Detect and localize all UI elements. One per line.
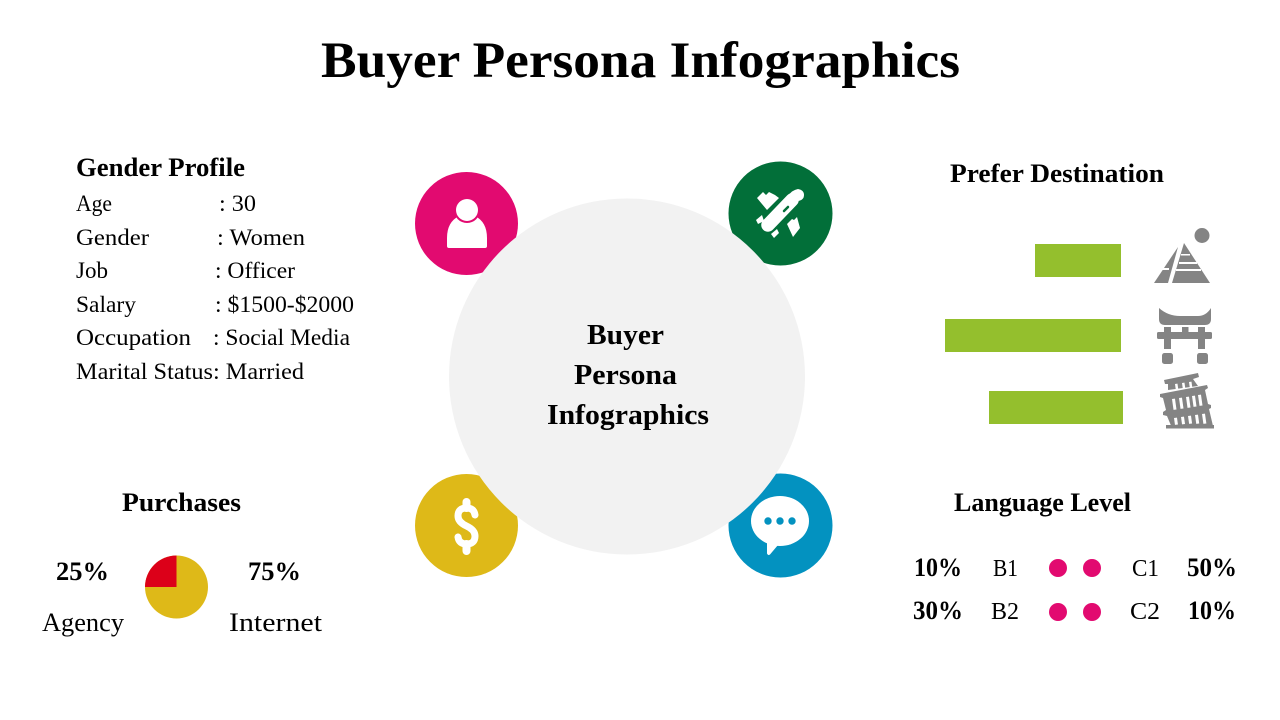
row: B2 and C2 <box>913 596 1236 625</box>
icon: torii gate <box>1157 308 1212 364</box>
profile row: job <box>76 258 295 283</box>
row: B1 and C1: 10% <box>914 553 962 582</box>
profile row: occupation: Occupation <box>76 325 192 350</box>
title: Buyer Persona Infographics <box>321 33 960 89</box>
stat: internet 75% <box>229 557 323 637</box>
central label: Persona <box>574 360 677 391</box>
stat: internet 75%: Internet <box>229 608 323 637</box>
profile row: gender <box>76 225 306 250</box>
icon: dollar badge <box>415 474 518 577</box>
heading: prefer destination: Prefer Destination <box>950 159 1165 188</box>
profile row: job: Job <box>76 258 108 283</box>
panel: prefer destination <box>945 159 1214 428</box>
profile row: occupation <box>76 325 350 350</box>
profile row: salary: Salary <box>76 292 137 317</box>
heading: gender profile: Gender Profile <box>76 153 245 182</box>
profile row: age: : 30 <box>219 191 256 216</box>
icon: chat bubble badge <box>728 474 832 578</box>
stat: internet 75%: 75% <box>248 557 301 586</box>
panel: gender profile <box>76 153 354 384</box>
row: B2 and C2: B2 <box>991 599 1019 625</box>
profile row: gender: Gender <box>76 225 149 250</box>
icon: person badge <box>415 172 518 275</box>
icon: airplane badge <box>728 162 832 266</box>
row: B1 and C1: C1 <box>1132 556 1159 582</box>
profile row: salary: : $1500-$2000 <box>215 292 354 317</box>
bar: pyramid destination <box>1035 244 1121 277</box>
panel: purchases <box>42 488 323 637</box>
row: B1 and C1 <box>914 553 1237 582</box>
stat: agency 25% <box>42 557 124 637</box>
profile row: marital status: Marital Status: Married <box>76 359 305 384</box>
profile row: gender: : Women <box>217 225 306 250</box>
heading: language level: Language Level <box>954 488 1131 517</box>
central circle <box>449 198 805 554</box>
profile row: age: Age <box>76 191 112 216</box>
bar: gate destination <box>945 319 1121 352</box>
stat: agency 25%: 25% <box>56 557 109 586</box>
profile row: salary <box>76 292 354 317</box>
pie chart <box>145 556 208 618</box>
row: B2 and C2: 30% <box>913 596 963 625</box>
central label: Buyer <box>587 320 664 351</box>
bar: tower destination <box>989 391 1123 424</box>
stat: agency 25%: Agency <box>42 608 124 637</box>
panel: language level <box>913 488 1237 625</box>
row: B1 and C1: 50% <box>1187 553 1237 582</box>
profile row: job: : Officer <box>215 258 295 283</box>
row: B2 and C2: 10% <box>1188 596 1236 625</box>
row: B2 and C2: C2 <box>1130 599 1160 625</box>
central label <box>547 320 709 431</box>
icon: pyramid <box>1154 228 1210 283</box>
profile row: occupation: : Social Media <box>213 325 350 350</box>
heading: purchases: Purchases <box>122 488 241 517</box>
central label: Infographics <box>547 400 709 431</box>
row: B1 and C1: B1 <box>993 556 1018 582</box>
profile row: age <box>76 191 256 216</box>
icon: leaning tower <box>1160 373 1214 428</box>
